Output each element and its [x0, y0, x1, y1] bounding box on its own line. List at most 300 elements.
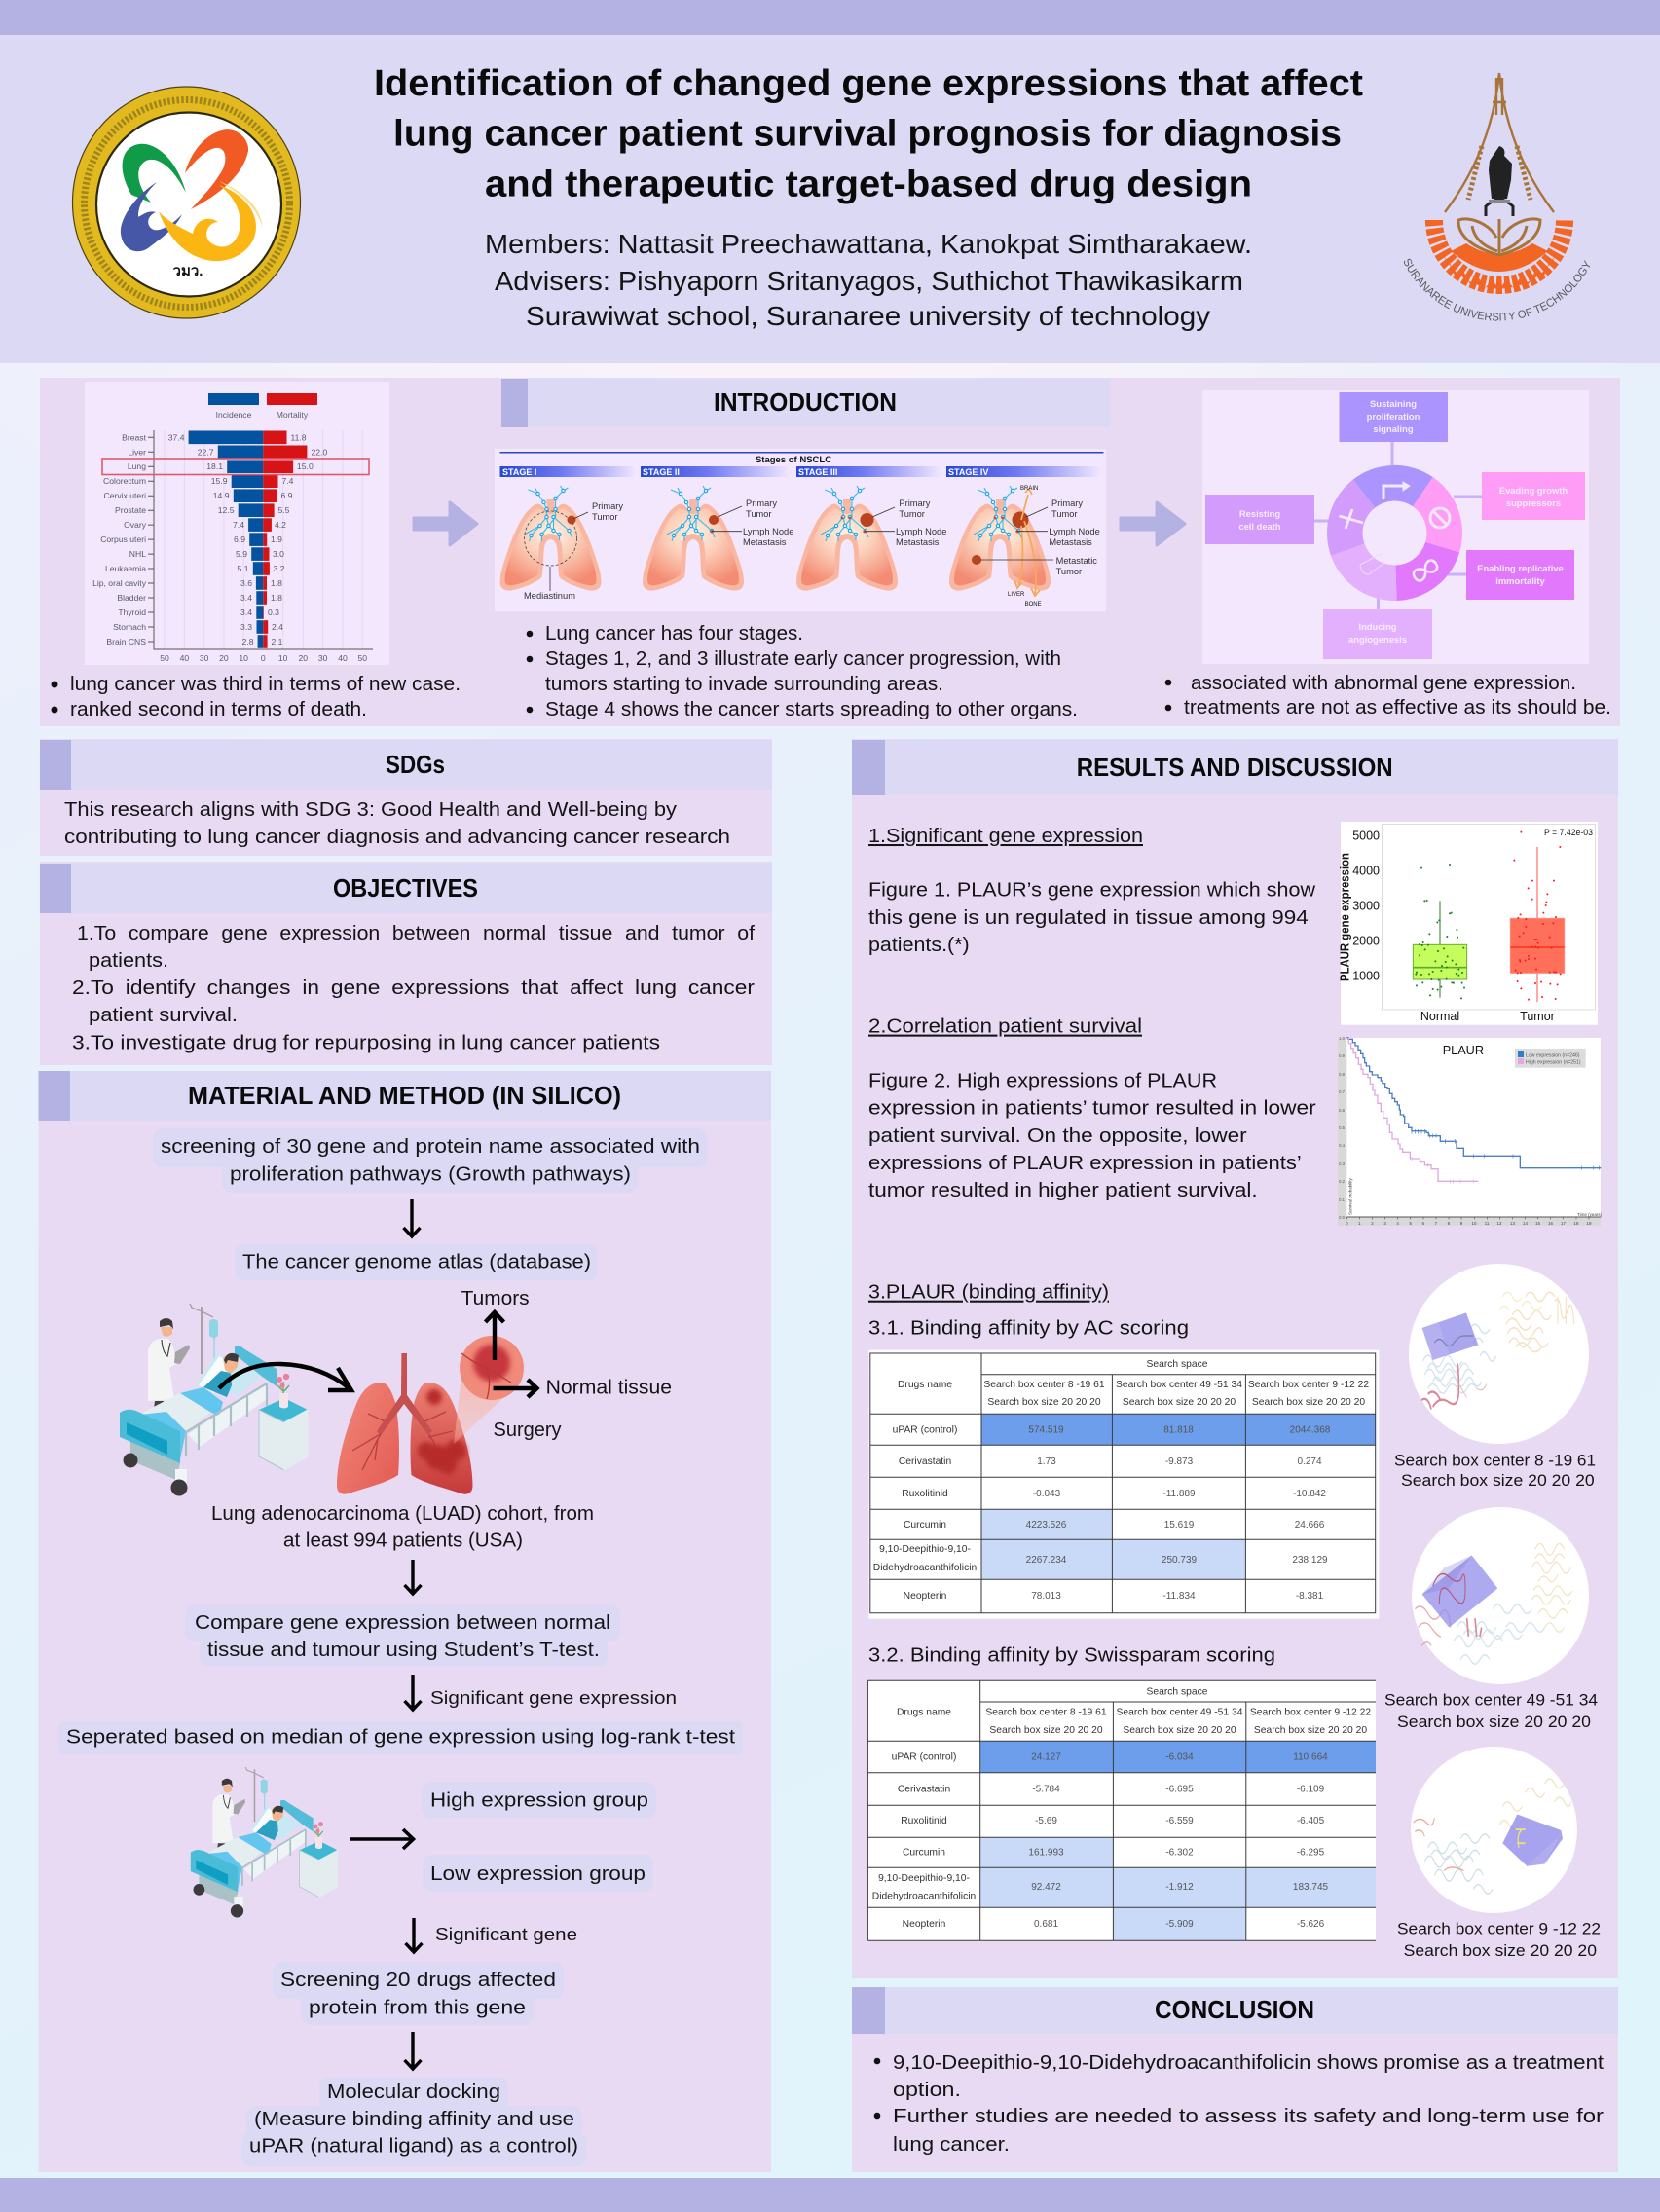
text block: authors: Surawiwat school, Suranaree university of technology	[526, 301, 1210, 331]
text block: conclusion bullets	[874, 2051, 1604, 2156]
chart: survival curve: 0.0	[1339, 1215, 1346, 1220]
figure: docking box 1	[1409, 1264, 1589, 1444]
bar chart: incidence and mortality by cancer type: Bladder	[117, 593, 146, 603]
label: replicative immortality: immortality	[1495, 575, 1546, 586]
bar chart: incidence and mortality by cancer type: Colorectum	[103, 476, 146, 486]
label: replicative immortality: Enabling replicative	[1477, 563, 1564, 573]
bar chart: incidence and mortality by cancer type: Breast	[122, 432, 147, 442]
table: Swissparam scoring: Search box center 8 -19 61	[985, 1708, 1107, 1717]
table: AC scoring: 0.274	[1297, 1456, 1322, 1467]
chart: box plot of PLAUR expression: 4000	[1352, 865, 1380, 878]
table: AC scoring: Search box center 9 -12 22	[1248, 1380, 1369, 1390]
chart: box plot of PLAUR expression: 5000	[1352, 830, 1380, 843]
text block: SDG statement: contributing to lung cancer diagnosis and advancing cancer research	[64, 826, 730, 848]
label: replicative immortality	[1466, 550, 1574, 600]
bar chart: incidence and mortality by cancer type: 50	[160, 653, 169, 663]
arrow: significant gene expression: Significant gene expression	[430, 1687, 677, 1708]
bar chart: incidence and mortality by cancer type: 15.9	[211, 476, 228, 486]
heading: binding affinity: 3.PLAUR (binding affinity)	[868, 1281, 1109, 1304]
text block: correlation patient survival: expressions of PLAUR expression in patients’	[868, 1152, 1302, 1174]
stage I: STAGE I	[502, 467, 536, 477]
step: gene screening: screening of 30 gene and protein name associated with	[161, 1135, 700, 1158]
stage II: Lymph Node	[743, 527, 793, 536]
bar chart: incidence and mortality by cancer type: NHL	[129, 549, 146, 559]
heading: conclusion	[852, 1987, 1618, 2034]
table: Swissparam scoring: 0.681	[1034, 1919, 1058, 1930]
chart: survival curve: 0.8	[1339, 1072, 1346, 1077]
chart: survival curve: 18	[1574, 1221, 1579, 1226]
step: drug screening	[273, 1962, 564, 2025]
bar chart: incidence and mortality by cancer type: 14.9	[213, 491, 230, 500]
icon: university logo	[1404, 72, 1591, 321]
text block: stages bullets: Stages 1, 2, and 3 illustrate early cancer progression, with	[545, 647, 1061, 670]
text block: authors	[485, 229, 1252, 331]
bar chart: incidence and mortality by cancer type: 3.6	[240, 578, 252, 588]
panel: results and discussion	[852, 739, 1618, 1978]
heading: binding affinity	[868, 1281, 1189, 1339]
heading: poster title: lung cancer patient survival prognosis for diagnosis	[393, 113, 1342, 154]
text block: correlation patient survival: patient survival. On the opposite, lower	[868, 1124, 1247, 1147]
text block: correlation patient survival	[868, 1015, 1316, 1201]
step: drug screening: Screening 20 drugs affected	[280, 1969, 556, 1991]
table: AC scoring: -11.834	[1162, 1591, 1196, 1602]
table: AC scoring: -10.842	[1293, 1489, 1326, 1499]
diagram: stages of NSCLC	[495, 449, 1106, 611]
heading: swissparam scoring: 3.2. Binding affinity by Swissparam scoring	[868, 1643, 1275, 1667]
stage III: Tumor	[899, 509, 925, 519]
heading: binding affinity: 3.1. Binding affinity by AC scoring	[868, 1316, 1189, 1339]
step: compare expression: tissue and tumour using Student’s T-test.	[207, 1639, 600, 1661]
label: sustaining proliferation: signaling	[1373, 424, 1414, 434]
bar chart: incidence and mortality by cancer type: 22.7	[198, 447, 214, 457]
chart: box plot of PLAUR expression: 3000	[1352, 900, 1380, 913]
step: LUAD cohort: at least 994 patients (USA)	[283, 1529, 523, 1552]
bar chart: incidence and mortality by cancer type: 22.0	[312, 447, 327, 457]
table: AC scoring: 250.739	[1162, 1555, 1198, 1566]
bar chart: incidence and mortality by cancer type: 30	[200, 653, 209, 663]
bar chart: incidence and mortality by cancer type: 7.4	[233, 520, 244, 530]
stage IV: Tumor	[1051, 509, 1078, 519]
label: surgery: Surgery	[493, 1419, 562, 1441]
chart: survival curve: 6	[1422, 1221, 1425, 1226]
table: AC scoring: Neopterin	[904, 1591, 947, 1602]
bar chart: incidence and mortality by cancer type: 6.9	[280, 491, 293, 500]
text block: stages bullets: Stage 4 shows the cancer starts spreading to other organs.	[545, 698, 1078, 720]
stage III: Primary	[899, 498, 931, 508]
chart: box plot of PLAUR expression: P = 7.42e-03	[1544, 828, 1593, 838]
bar chart: incidence and mortality by cancer type: 0.3	[268, 608, 279, 617]
chart: survival curve: 12	[1497, 1221, 1502, 1226]
bar chart: incidence and mortality by cancer type: 2.4	[272, 622, 283, 632]
table: Swissparam scoring: uPAR (control)	[892, 1752, 956, 1762]
heading: introduction	[501, 379, 1110, 427]
bar chart: incidence and mortality by cancer type: 0	[261, 653, 266, 663]
bar chart: incidence and mortality by cancer type: Leukaemia	[105, 564, 146, 573]
caption: docking box 2	[1384, 1692, 1598, 1731]
text block: objectives list: 3.To investigate drug for repurposing in lung cancer patients	[72, 1032, 660, 1053]
panel: material and method	[39, 1071, 771, 2172]
step: median split	[58, 1721, 743, 1755]
step: low expression group: Low expression group	[430, 1862, 646, 1885]
illustration: patient and doctor small	[191, 1767, 338, 1917]
label: evading growth suppressors: suppressors	[1506, 498, 1561, 508]
text block: stages bullets: Lung cancer has four stages.	[545, 622, 803, 645]
table: Swissparam scoring: -6.695	[1165, 1784, 1194, 1795]
bar chart: incidence and mortality by cancer type: 4.2	[275, 520, 286, 530]
panel: objectives	[40, 862, 772, 1065]
table: Swissparam scoring: -5.784	[1032, 1784, 1060, 1795]
diagram: hallmarks of cancer	[1202, 390, 1589, 664]
bar chart: incidence and mortality by cancer type: 37.4	[168, 432, 185, 442]
stage II: Primary	[746, 498, 777, 508]
arrow: significant gene expression	[405, 1675, 677, 1710]
chart: survival curve: Time (years)	[1577, 1212, 1603, 1217]
panel: title header	[0, 35, 1660, 363]
chart: survival curve: 0.1	[1339, 1198, 1346, 1202]
bar chart: incidence and mortality by cancer type: Lung	[128, 461, 146, 471]
text block: incidence bullets	[51, 673, 461, 720]
table: AC scoring: 238.129	[1292, 1555, 1328, 1566]
bar chart: incidence and mortality by cancer type: 3.4	[240, 593, 252, 603]
table: Swissparam scoring: Search space	[1147, 1686, 1208, 1698]
table: AC scoring: Didehydroacanthifolicin	[873, 1563, 978, 1573]
step: median split: Seperated based on median of gene expression using log-rank t-test	[66, 1725, 735, 1749]
chart: survival curve: 11	[1485, 1221, 1490, 1226]
heading: SDGs	[40, 740, 772, 790]
step: cancer genome atlas	[235, 1244, 598, 1281]
bar chart: incidence and mortality by cancer type: Brain CNS	[106, 637, 146, 646]
table: Swissparam scoring: -6.302	[1165, 1848, 1194, 1858]
bar chart: incidence and mortality by cancer type: 40	[180, 653, 189, 663]
chart: survival curve: 19	[1587, 1221, 1592, 1226]
bar chart: incidence and mortality by cancer type: 15.0	[297, 461, 314, 471]
table: AC scoring: -0.043	[1033, 1489, 1061, 1499]
caption: docking box 3	[1397, 1921, 1601, 1960]
arrow: patients to groups	[350, 1829, 413, 1849]
table: AC scoring: Search box center 49 -51 34	[1116, 1380, 1242, 1390]
bar chart: incidence and mortality by cancer type: 5.9	[236, 549, 247, 559]
figure: docking box 2	[1412, 1507, 1589, 1684]
table: AC scoring: 4223.526	[1026, 1520, 1067, 1530]
table: Swissparam scoring: -6.559	[1165, 1816, 1194, 1826]
text block: objectives list: patients.	[89, 949, 168, 972]
chart: box plot of PLAUR expression	[1338, 822, 1598, 1025]
bar chart: incidence and mortality by cancer type: 11.8	[290, 432, 307, 442]
text block: stages bullets	[527, 622, 1078, 720]
chart: survival curve: Survival probability	[1347, 1177, 1353, 1215]
stage IV: Tumor	[1056, 567, 1082, 576]
arrow: chart to introduction	[414, 502, 477, 545]
bar chart: incidence and mortality by cancer type: 3.3	[240, 622, 252, 632]
bar chart: incidence and mortality by cancer type: 12.5	[218, 505, 235, 515]
text block: correlation patient survival: 2.Correlation patient survival	[868, 1015, 1142, 1038]
table: Swissparam scoring: 161.993	[1028, 1848, 1064, 1858]
text block: stages bullets: tumors starting to invade surrounding areas.	[545, 673, 943, 695]
stage II: STAGE II	[643, 467, 680, 477]
chart: survival curve	[1338, 1036, 1603, 1226]
bar chart: incidence and mortality by cancer type: 1.9	[271, 535, 282, 544]
bar chart: incidence and mortality by cancer type: 10	[239, 653, 248, 663]
bar chart: incidence and mortality by cancer type: 6.9	[234, 535, 245, 544]
stage IV: LIVER	[1008, 592, 1025, 598]
heading: conclusion: CONCLUSION	[1155, 1995, 1314, 2024]
text block: significant gene expression: this gene is un regulated in tissue among 994	[868, 906, 1309, 929]
chart: survival curve: 1.0	[1339, 1036, 1346, 1041]
bar chart: incidence and mortality by cancer type: 2.8	[242, 637, 254, 646]
text block: treatment bullets: associated with abnormal gene expression.	[1191, 672, 1576, 694]
table: AC scoring: Curcumin	[904, 1520, 946, 1530]
table: AC scoring: 15.619	[1164, 1520, 1195, 1530]
step: molecular docking: (Measure binding affinity and use	[254, 2108, 574, 2130]
text block: SDG statement	[64, 798, 730, 848]
chart: survival curve: 8	[1448, 1221, 1451, 1226]
icon: university logo: SURANAREE UNIVERSITY OF TECHNOLOGY	[1404, 259, 1591, 321]
chart: survival curve: 4	[1396, 1221, 1399, 1226]
table: Swissparam scoring: Search box size 20 20 20	[1123, 1725, 1236, 1736]
stage I: Mediastinum	[524, 591, 575, 601]
stage III: STAGE III	[798, 467, 837, 477]
table: AC scoring: 1.73	[1037, 1456, 1056, 1467]
bar chart: incidence and mortality by cancer type: Corpus uteri	[100, 535, 146, 544]
chart: survival curve: 0.4	[1339, 1143, 1346, 1148]
table: Swissparam scoring: -1.912	[1165, 1882, 1194, 1893]
chart: box plot of PLAUR expression: Normal	[1420, 1010, 1459, 1023]
caption: docking box 1: Search box center 8 -19 61	[1394, 1453, 1596, 1470]
text block: objectives list: 2.To identify changes in gene expressions that affect lung cancer	[72, 977, 755, 999]
stage IV: STAGE IV	[948, 467, 988, 477]
stage IV: BRAIN	[1020, 486, 1038, 492]
heading: material and method: MATERIAL AND METHOD (IN SILICO)	[188, 1081, 621, 1110]
bar chart: incidence and mortality by cancer type: 20	[219, 653, 229, 663]
bar chart: incidence and mortality by cancer type: 3.0	[273, 549, 284, 559]
table: AC scoring: Search box size 20 20 20	[1123, 1397, 1236, 1408]
bar chart: incidence and mortality by cancer type: Incidence	[216, 410, 252, 420]
icon: school programme logo: วมว.	[173, 263, 203, 279]
table: Swissparam scoring: Drugs name	[897, 1708, 951, 1717]
chart: survival curve: 2	[1371, 1221, 1374, 1226]
bar chart: incidence and mortality by cancer type: 18.1	[206, 461, 223, 471]
step: molecular docking: Molecular docking	[327, 2081, 500, 2103]
text block: correlation patient survival: expression in patients’ tumor resulted in lower	[868, 1097, 1316, 1120]
table: Swissparam scoring: Search box center 9 -12 22	[1250, 1708, 1371, 1717]
bar chart: incidence and mortality by cancer type: Ovary	[124, 520, 147, 530]
chart: survival curve: 14	[1523, 1221, 1528, 1226]
stage IV: Metastatic	[1056, 556, 1097, 566]
text block: objectives list	[72, 922, 755, 1053]
bar chart: incidence and mortality by cancer type: Cervix uteri	[104, 491, 146, 500]
table: AC scoring: Search box size 20 20 20	[1252, 1397, 1365, 1408]
figure: docking box 3	[1411, 1747, 1577, 1913]
chart: survival curve: 1	[1358, 1221, 1361, 1226]
text block: incidence bullets: lung cancer was third in terms of new case.	[70, 673, 461, 695]
chart: survival curve: PLAUR	[1443, 1043, 1484, 1057]
legend: survival groups	[1515, 1049, 1586, 1068]
table: Swissparam scoring: -5.69	[1035, 1816, 1057, 1826]
chart: survival curve: 0.5	[1339, 1125, 1346, 1130]
arrow	[403, 1199, 421, 1236]
chart: box plot of PLAUR expression: Tumor	[1520, 1010, 1555, 1023]
label: inducing angiogenesis	[1323, 609, 1432, 659]
chart: survival curve: 0.9	[1339, 1053, 1346, 1058]
heading: poster title	[374, 63, 1363, 204]
table: Swissparam scoring: Curcumin	[903, 1848, 945, 1858]
text block: authors: Advisers: Pishyaporn Sritanyagos, Suthichot Thawikasikarm	[495, 266, 1243, 296]
table: AC scoring: -9.873	[1165, 1456, 1194, 1467]
stage I	[500, 466, 637, 601]
panel: conclusion	[852, 1987, 1618, 2172]
arrow	[405, 1560, 421, 1594]
top band	[0, 0, 1660, 35]
arrow: significant gene	[405, 1918, 577, 1952]
caption: docking box 1: Search box size 20 20 20	[1401, 1472, 1595, 1490]
stage III: Lymph Node	[896, 527, 946, 536]
step: compare expression	[185, 1604, 620, 1667]
table: AC scoring: 2044.368	[1290, 1425, 1331, 1435]
caption: docking box 2: Search box center 49 -51 34	[1384, 1692, 1598, 1710]
table: Swissparam scoring: -6.295	[1297, 1848, 1325, 1858]
stage IV: BONE	[1025, 602, 1042, 608]
label: sustaining proliferation: proliferation	[1367, 411, 1420, 422]
chart: box plot of PLAUR expression: PLAUR gene expression	[1338, 853, 1351, 981]
stage II: Tumor	[746, 509, 772, 519]
arrow: up to tumors	[485, 1312, 504, 1360]
table: Swissparam scoring: 9,10-Deepithio-9,10-	[878, 1873, 970, 1884]
heading: poster title: and therapeutic target-based drug design	[485, 164, 1252, 204]
table: Swissparam scoring: -5.909	[1165, 1919, 1194, 1930]
text block: objectives list: patient survival.	[89, 1004, 238, 1026]
arrow	[405, 2032, 421, 2069]
table: AC scoring: Search box center 8 -19 61	[983, 1380, 1105, 1390]
step: LUAD cohort: Lung adenocarcinoma (LUAD) cohort, from	[211, 1502, 594, 1525]
bar chart: incidence and mortality by cancer type: Stomach	[113, 622, 146, 632]
arrow: right to normal tissue	[493, 1380, 537, 1397]
caption: docking box 3: Search box size 20 20 20	[1404, 1942, 1597, 1960]
stage II: Metastasis	[743, 537, 787, 547]
chart: survival curve: 9	[1460, 1221, 1463, 1226]
label: normal tissue: Normal tissue	[546, 1377, 672, 1399]
table: AC scoring: Search space	[1147, 1359, 1208, 1370]
text block: correlation patient survival: tumor resulted in higher patient survival.	[868, 1179, 1258, 1201]
step: gene screening	[153, 1128, 707, 1193]
text block: correlation patient survival: Figure 2. High expressions of PLAUR	[868, 1069, 1217, 1092]
heading: poster title: Identification of changed gene expressions that affect	[374, 63, 1363, 104]
panel: introduction	[40, 378, 1620, 726]
chart: survival curve: 0.6	[1339, 1108, 1346, 1113]
table: AC scoring: Drugs name	[898, 1380, 952, 1390]
table: Swissparam scoring: Didehydroacanthifolicin	[872, 1891, 977, 1902]
bar chart: incidence and mortality by cancer type: 3.2	[273, 564, 285, 573]
text block: treatment bullets: treatments are not as effective as its should be.	[1184, 696, 1611, 719]
bar chart: incidence and mortality by cancer type: Thyroid	[118, 608, 146, 617]
bar chart: incidence and mortality by cancer type: 10	[278, 653, 288, 663]
chart: survival curve: 13	[1510, 1221, 1515, 1226]
chart: survival curve: 0.3	[1339, 1161, 1346, 1166]
step: gene screening: proliferation pathways (Growth pathways)	[230, 1162, 631, 1186]
table: AC scoring: -8.381	[1296, 1591, 1324, 1602]
bar chart: incidence and mortality by cancer type: 1.8	[271, 593, 282, 603]
table: Swissparam scoring: -6.405	[1297, 1816, 1325, 1826]
table: Swissparam scoring: -5.626	[1297, 1919, 1325, 1930]
table: AC scoring: Search box size 20 20 20	[987, 1397, 1101, 1408]
stage I: Tumor	[592, 512, 618, 522]
stage III	[796, 466, 946, 591]
panel: SDGs	[40, 739, 772, 856]
heading: objectives: OBJECTIVES	[333, 873, 478, 903]
table: Swissparam scoring: Search box size 20 20 20	[989, 1725, 1103, 1736]
diagram: stages of NSCLC: Stages of NSCLC	[756, 455, 831, 465]
text block: incidence bullets: ranked second in terms of death.	[70, 698, 367, 720]
step: high expression group	[422, 1782, 656, 1819]
heading: SDGs: SDGs	[386, 750, 445, 779]
table: AC scoring: Ruxolitinid	[902, 1489, 948, 1499]
stage IV: Primary	[1051, 498, 1083, 508]
table: Swissparam scoring: -6.109	[1297, 1784, 1325, 1795]
step: molecular docking	[241, 2077, 586, 2166]
chart: survival curve: 15	[1535, 1221, 1540, 1226]
caption: docking box 2: Search box size 20 20 20	[1397, 1714, 1591, 1731]
bar chart: incidence and mortality by cancer type: Liver	[128, 447, 146, 457]
label: tumors: Tumors	[461, 1287, 530, 1309]
bar chart: incidence and mortality by cancer type: Prostate	[115, 505, 146, 515]
text block: objectives list: 1.To compare gene expression between normal tissue and tumor of	[77, 922, 755, 944]
text block: treatment bullets	[1165, 672, 1611, 719]
table: AC scoring: uPAR (control)	[893, 1425, 957, 1435]
chart: survival curve: 0.7	[1339, 1089, 1346, 1094]
chart: survival curve: 16	[1548, 1221, 1553, 1226]
label: sustaining proliferation	[1340, 392, 1448, 442]
label: evading growth suppressors: Evading growth	[1499, 485, 1568, 496]
text block: SDG statement: This research aligns with SDG 3: Good Health and Well-being by	[64, 798, 678, 821]
bar chart: incidence and mortality by cancer type	[85, 382, 389, 665]
stage I: Primary	[592, 501, 623, 511]
label: resisting cell death: Resisting	[1239, 508, 1280, 519]
stage IV	[946, 466, 1101, 608]
bar chart: incidence and mortality by cancer type: Lip, oral cavity	[92, 578, 147, 588]
label: resisting cell death	[1205, 495, 1314, 544]
text block: conclusion bullets: lung cancer.	[893, 2133, 1010, 2156]
legend: survival groups: Low expression (n=246)	[1526, 1053, 1580, 1059]
text block: conclusion bullets: Further studies are needed to assess its safety and long-term use for	[893, 2105, 1604, 2127]
stage II	[641, 466, 793, 591]
chart: box plot of PLAUR expression: 1000	[1352, 970, 1380, 983]
label: inducing angiogenesis: angiogenesis	[1348, 634, 1407, 645]
chart: survival curve: 5	[1409, 1221, 1412, 1226]
table: AC scoring: 78.013	[1031, 1591, 1061, 1602]
text block: conclusion bullets: option.	[893, 2079, 961, 2101]
chart: survival curve: 10	[1472, 1221, 1477, 1226]
illustration: lungs with tumor biopsy	[337, 1336, 524, 1494]
text block: conclusion bullets: 9,10-Deepithio-9,10-Didehydroacanthifolicin shows promise as a treatment	[893, 2051, 1604, 2074]
chart: survival curve: 7	[1435, 1221, 1438, 1226]
stage IV: Metastasis	[1049, 537, 1092, 547]
chart: survival curve: 0.2	[1339, 1179, 1346, 1184]
text block: significant gene expression: 1.Significant gene expression	[868, 825, 1143, 847]
step: low expression group	[423, 1855, 653, 1892]
table: AC scoring: 9,10-Deepithio-9,10-	[879, 1544, 971, 1555]
chart: survival curve: 0	[1346, 1221, 1348, 1226]
chart: survival curve: 3	[1383, 1221, 1386, 1226]
table: AC scoring: 24.666	[1295, 1520, 1325, 1530]
illustration: patient and doctor	[120, 1304, 308, 1495]
table: Swissparam scoring: Cerivastatin	[898, 1784, 950, 1795]
bar chart: incidence and mortality by cancer type: 3.4	[240, 608, 252, 617]
chart: survival curve: 17	[1561, 1221, 1566, 1226]
table: Swissparam scoring: 92.472	[1031, 1882, 1061, 1893]
table: Swissparam scoring	[867, 1680, 1376, 1940]
bar chart: incidence and mortality by cancer type: 40	[338, 653, 348, 663]
heading: results and discussion	[852, 740, 1618, 795]
step: molecular docking: uPAR (natural ligand) as a control)	[249, 2134, 578, 2157]
